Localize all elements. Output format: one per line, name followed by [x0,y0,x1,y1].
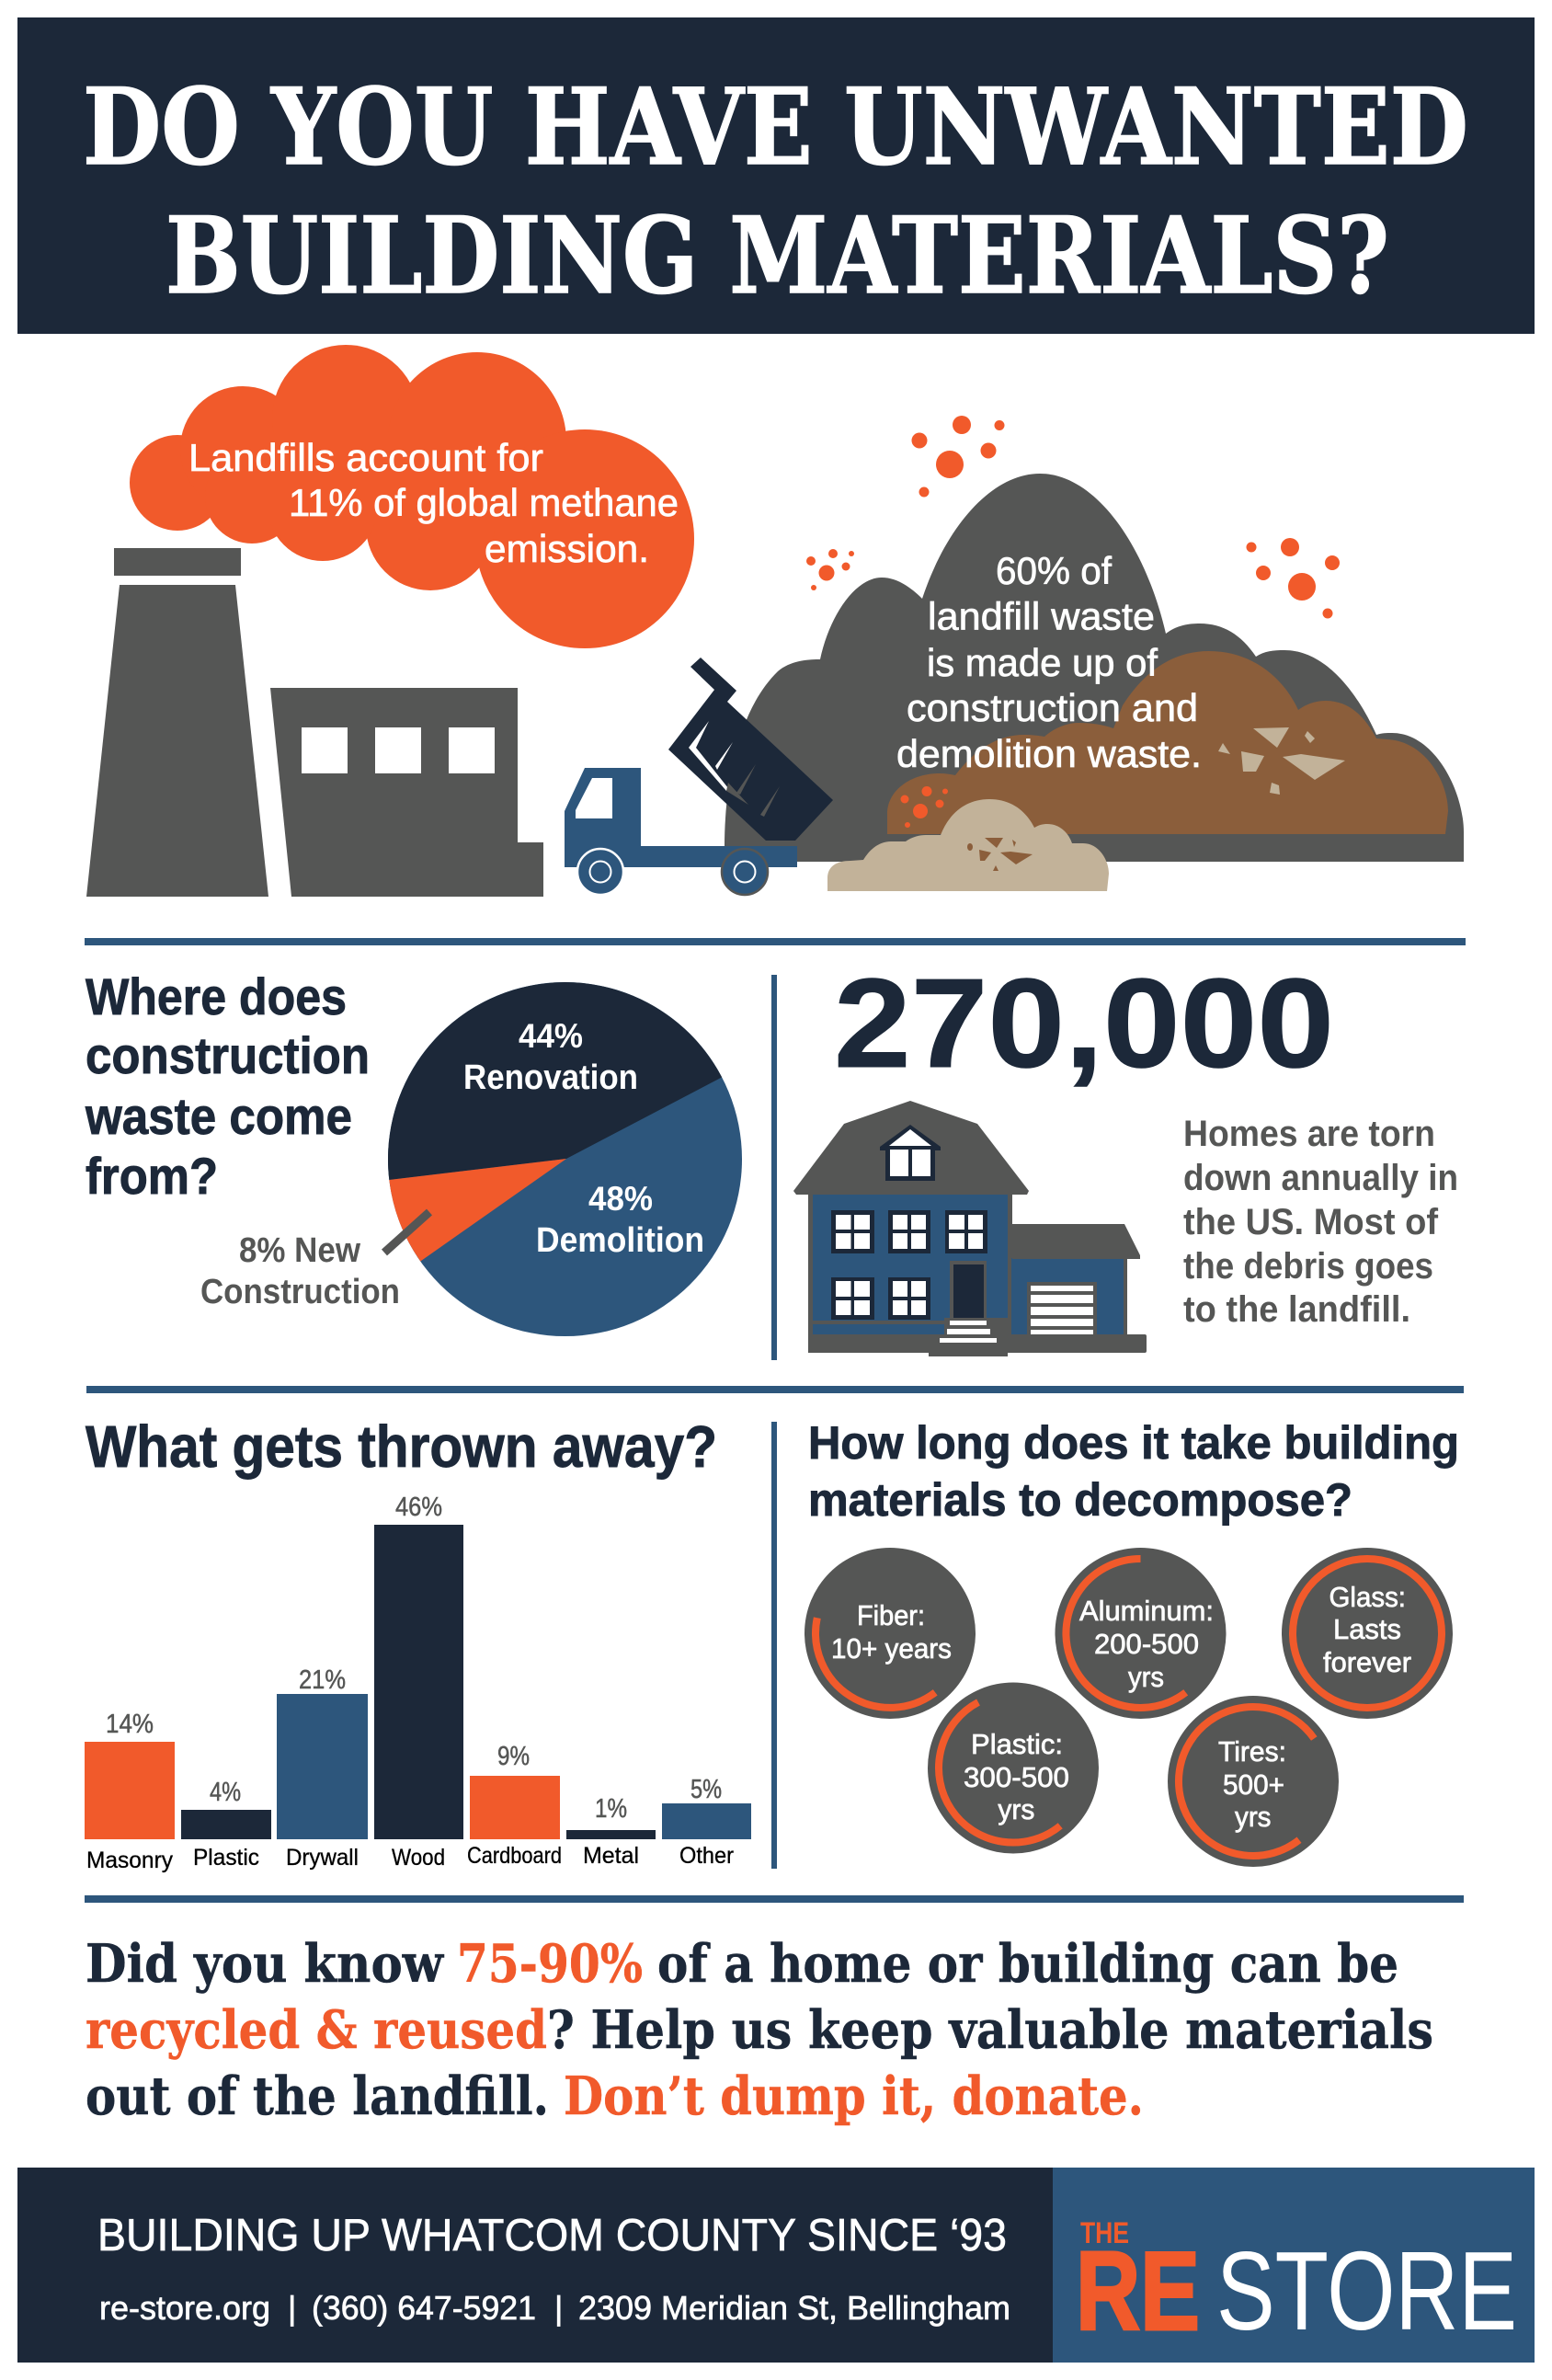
badge: aluminum: 200-500 [1094,1628,1199,1660]
heading: where does construction waste come from: waste come [85,1087,352,1145]
callout: 8% new construction: Construction [200,1273,400,1311]
text: homes description: Homes are torn [1183,1114,1435,1154]
badge: tires: 500+ [1223,1768,1284,1801]
badge: plastic: 300-500 [964,1761,1069,1793]
bar chart: Masonry [86,1848,173,1873]
icon: smoke cloud with methane statistic: Landfills account for [188,436,543,479]
text: landfill waste statistic: construction and [907,686,1198,729]
text: homes description [1183,1114,1458,1330]
footer contact details: | [554,2289,563,2327]
bar chart: Metal [583,1843,639,1869]
text: homes description: the debris goes [1183,1246,1433,1287]
footer contact details [99,2289,1010,2327]
bar chart: 9% [497,1742,530,1771]
callout: did you know: ? Help us keep valuable materials [547,1999,1433,2061]
heading: what gets thrown away: What gets thrown away? [86,1413,717,1480]
icon: dump truck [565,658,833,895]
icon: smoke cloud with methane statistic [130,345,694,648]
heading: how long to decompose: How long does it take building [808,1417,1459,1469]
panel: decomposition times [805,1417,1459,1867]
text: homes description: down annually in [1183,1158,1458,1198]
callout: did you know: 75-90% [457,1933,643,1995]
bar chart [85,1493,751,1873]
badge: fiber: 10+ years [831,1632,952,1665]
icon: landfill mound [725,416,1464,891]
bar chart: Drywall [286,1845,359,1871]
heading: where does construction waste come from: from? [86,1147,218,1205]
text: landfill waste statistic: is made up of [927,641,1158,684]
heading: where does construction waste come from: Where does [86,967,347,1025]
bar chart: 1% [595,1794,627,1824]
bar chart: 46% [395,1493,442,1522]
logo: The ReStore [1076,2216,1517,2353]
footer contact details: re-store.org [99,2289,270,2327]
callout: did you know: out of the landfill. [86,2065,549,2127]
panel: homes torn down [793,953,1458,1356]
footer contact details: | [288,2289,296,2327]
big number: 270,000 [834,953,1334,1094]
badge: tires [1168,1696,1339,1867]
badge: fiber [805,1548,976,1719]
heading: how long to decompose [808,1417,1459,1526]
pie chart [388,982,742,1336]
callout: did you know: recycled & reused [86,1999,547,2061]
badge: plastic: Plastic: [971,1728,1063,1760]
badge: aluminum [1056,1548,1227,1719]
pie chart: 48% [588,1180,653,1218]
callout: 8% new construction [200,1212,429,1311]
title banner [17,17,1535,334]
footer tagline: BUILDING UP WHATCOM COUNTY SINCE ‘93 [97,2211,1007,2260]
pie chart: Demolition [536,1221,704,1260]
pie chart: 44% [519,1017,583,1055]
heading: where does construction waste come from: construction [86,1026,370,1084]
callout: did you know [86,1933,1433,2127]
text: landfill waste statistic [896,549,1202,775]
badge: aluminum: Aluminum: [1079,1595,1214,1627]
text: homes description: the US. Most of [1183,1202,1439,1242]
icon: smoke cloud with methane statistic: 11% of global methane [289,481,679,524]
badge: glass [1282,1548,1453,1719]
bar chart: Other [679,1843,734,1869]
badge: aluminum: yrs [1128,1661,1164,1693]
panel: landfill illustration [86,345,1464,897]
bar chart: Cardboard [467,1843,562,1869]
footer contact details: (360) 647-5921 [312,2289,536,2327]
callout: did you know: of a home or building can be [657,1933,1398,1995]
text: homes description: to the landfill. [1183,1289,1410,1330]
text: landfill waste statistic: landfill waste [928,594,1155,638]
footer contact details: 2309 Meridian St, Bellingham [578,2289,1010,2327]
bar chart: 21% [299,1665,346,1695]
pie chart: Renovation [463,1058,638,1097]
badge: fiber: Fiber: [857,1599,925,1631]
bar chart: 5% [690,1775,722,1804]
badge: glass: Glass: [1329,1581,1406,1613]
heading: how long to decompose: materials to decompose? [808,1474,1352,1526]
callout: 8% new construction: 8% New [239,1231,360,1270]
callout: did you know: Don’t dump it, donate. [564,2065,1144,2127]
heading: where does construction waste come from [85,967,370,1205]
logo: The ReStore: RE [1076,2228,1200,2353]
callout: did you know: Did you know [86,1933,445,1995]
panel: where construction waste comes from [85,967,742,1336]
logo: The ReStore: THE [1080,2216,1129,2249]
badge: plastic [928,1683,1099,1854]
bar chart: 4% [210,1778,241,1807]
footer [17,2168,1535,2363]
bar chart: Wood [392,1845,445,1871]
badge: tires: Tires: [1218,1735,1286,1768]
badge: tires: yrs [1235,1801,1271,1833]
badge: glass: forever [1323,1646,1411,1678]
icon: house [793,1101,1147,1356]
text: landfill waste statistic: 60% of [996,549,1112,592]
badge: glass: Lasts [1333,1613,1401,1645]
icon: smoke cloud with methane statistic: emission. [485,527,649,570]
badge: plastic: yrs [998,1793,1034,1825]
text: landfill waste statistic: demolition waste. [896,732,1202,775]
panel: what gets thrown away [85,1413,751,1873]
bar chart: 14% [106,1710,154,1739]
bar chart: Plastic [193,1845,259,1871]
icon: factory [86,548,543,897]
